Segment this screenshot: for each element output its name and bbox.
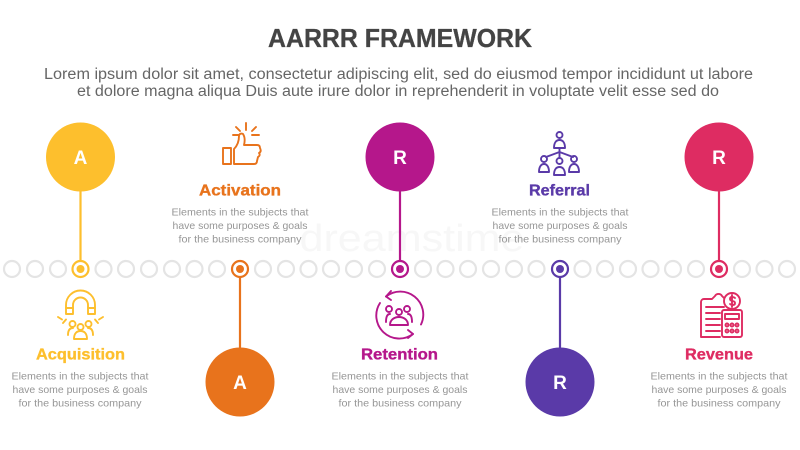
heading: Referral: Referral [529,182,590,200]
description: Acquisition: have some purposes & goals [12,384,148,396]
badge: R crimson [684,122,754,192]
badge: A orange [206,348,274,416]
node: Acquisition [72,261,88,277]
step: Revenue [650,122,788,410]
heading: Activation: Activation [199,182,281,200]
description: Activation: for the business company [178,234,302,246]
step: Referral [492,132,629,416]
badge: R purple [526,348,594,416]
description: Acquisition [12,370,149,410]
badge: A yellow: A [74,148,88,169]
description: Acquisition: Elements in the subjects that [12,370,149,382]
heading: Retention: Retention [361,346,438,364]
description: Acquisition: for the business company [18,398,142,410]
description: Activation: Elements in the subjects that [172,206,309,218]
badge: R purple: R [553,373,567,394]
node: Referral [552,261,568,277]
icon: retention cycle [376,291,423,339]
intro paragraph: Lorem ipsum dolor sit amet, consectetur adipiscing elit, sed do eiusmod tempor incididunt ut labore [44,66,753,83]
description: Activation [172,206,309,246]
description: Revenue: have some purposes & goals [652,384,786,396]
watermark: dreamstime [300,218,524,260]
node: Retention [392,261,408,277]
description: Retention [332,370,469,410]
description: Retention: Elements in the subjects that [332,370,469,382]
heading: Revenue: Revenue [685,346,753,364]
badge: R magenta: R [393,148,407,169]
badge: A yellow [46,122,115,192]
description: Referral: have some purposes & goals [492,220,628,232]
step: Acquisition [12,122,149,410]
description: Revenue [650,370,788,410]
icon: clipboard and calculator [701,293,742,337]
intro paragraph: et dolore magna aliqua Duis aute irure dolor in reprehenderit in voluptate velit esse sed do [77,83,719,100]
icon: referral network [539,132,579,175]
badge: A orange: A [233,373,247,394]
description: Referral: for the business company [498,234,622,246]
title: AARRR FRAMEWORK [268,23,532,53]
heading: Acquisition: Acquisition [36,346,125,364]
icon: thumbs up [223,123,261,164]
description: Revenue: for the business company [658,398,781,410]
intro paragraph [44,66,753,100]
description: Referral: Elements in the subjects that [492,206,629,218]
description: Revenue: Elements in the subjects that [650,370,788,382]
description: Retention: for the business company [338,398,462,410]
icon: magnet with people [58,290,103,339]
connector: Activation [239,269,241,382]
connector: Acquisition [79,157,82,269]
node: Activation [232,261,248,277]
step: Retention [332,122,469,410]
description: Retention: have some purposes & goals [332,384,468,396]
description: Referral [492,206,629,246]
connector: Referral [559,269,561,382]
connector: Revenue [718,157,720,269]
timeline dots [4,261,795,277]
badge: R crimson: R [712,148,726,169]
node: Revenue [711,261,727,277]
step: Activation [172,123,309,416]
badge: R magenta [366,122,434,192]
connector: Retention [399,157,401,269]
description: Activation: have some purposes & goals [172,220,308,232]
